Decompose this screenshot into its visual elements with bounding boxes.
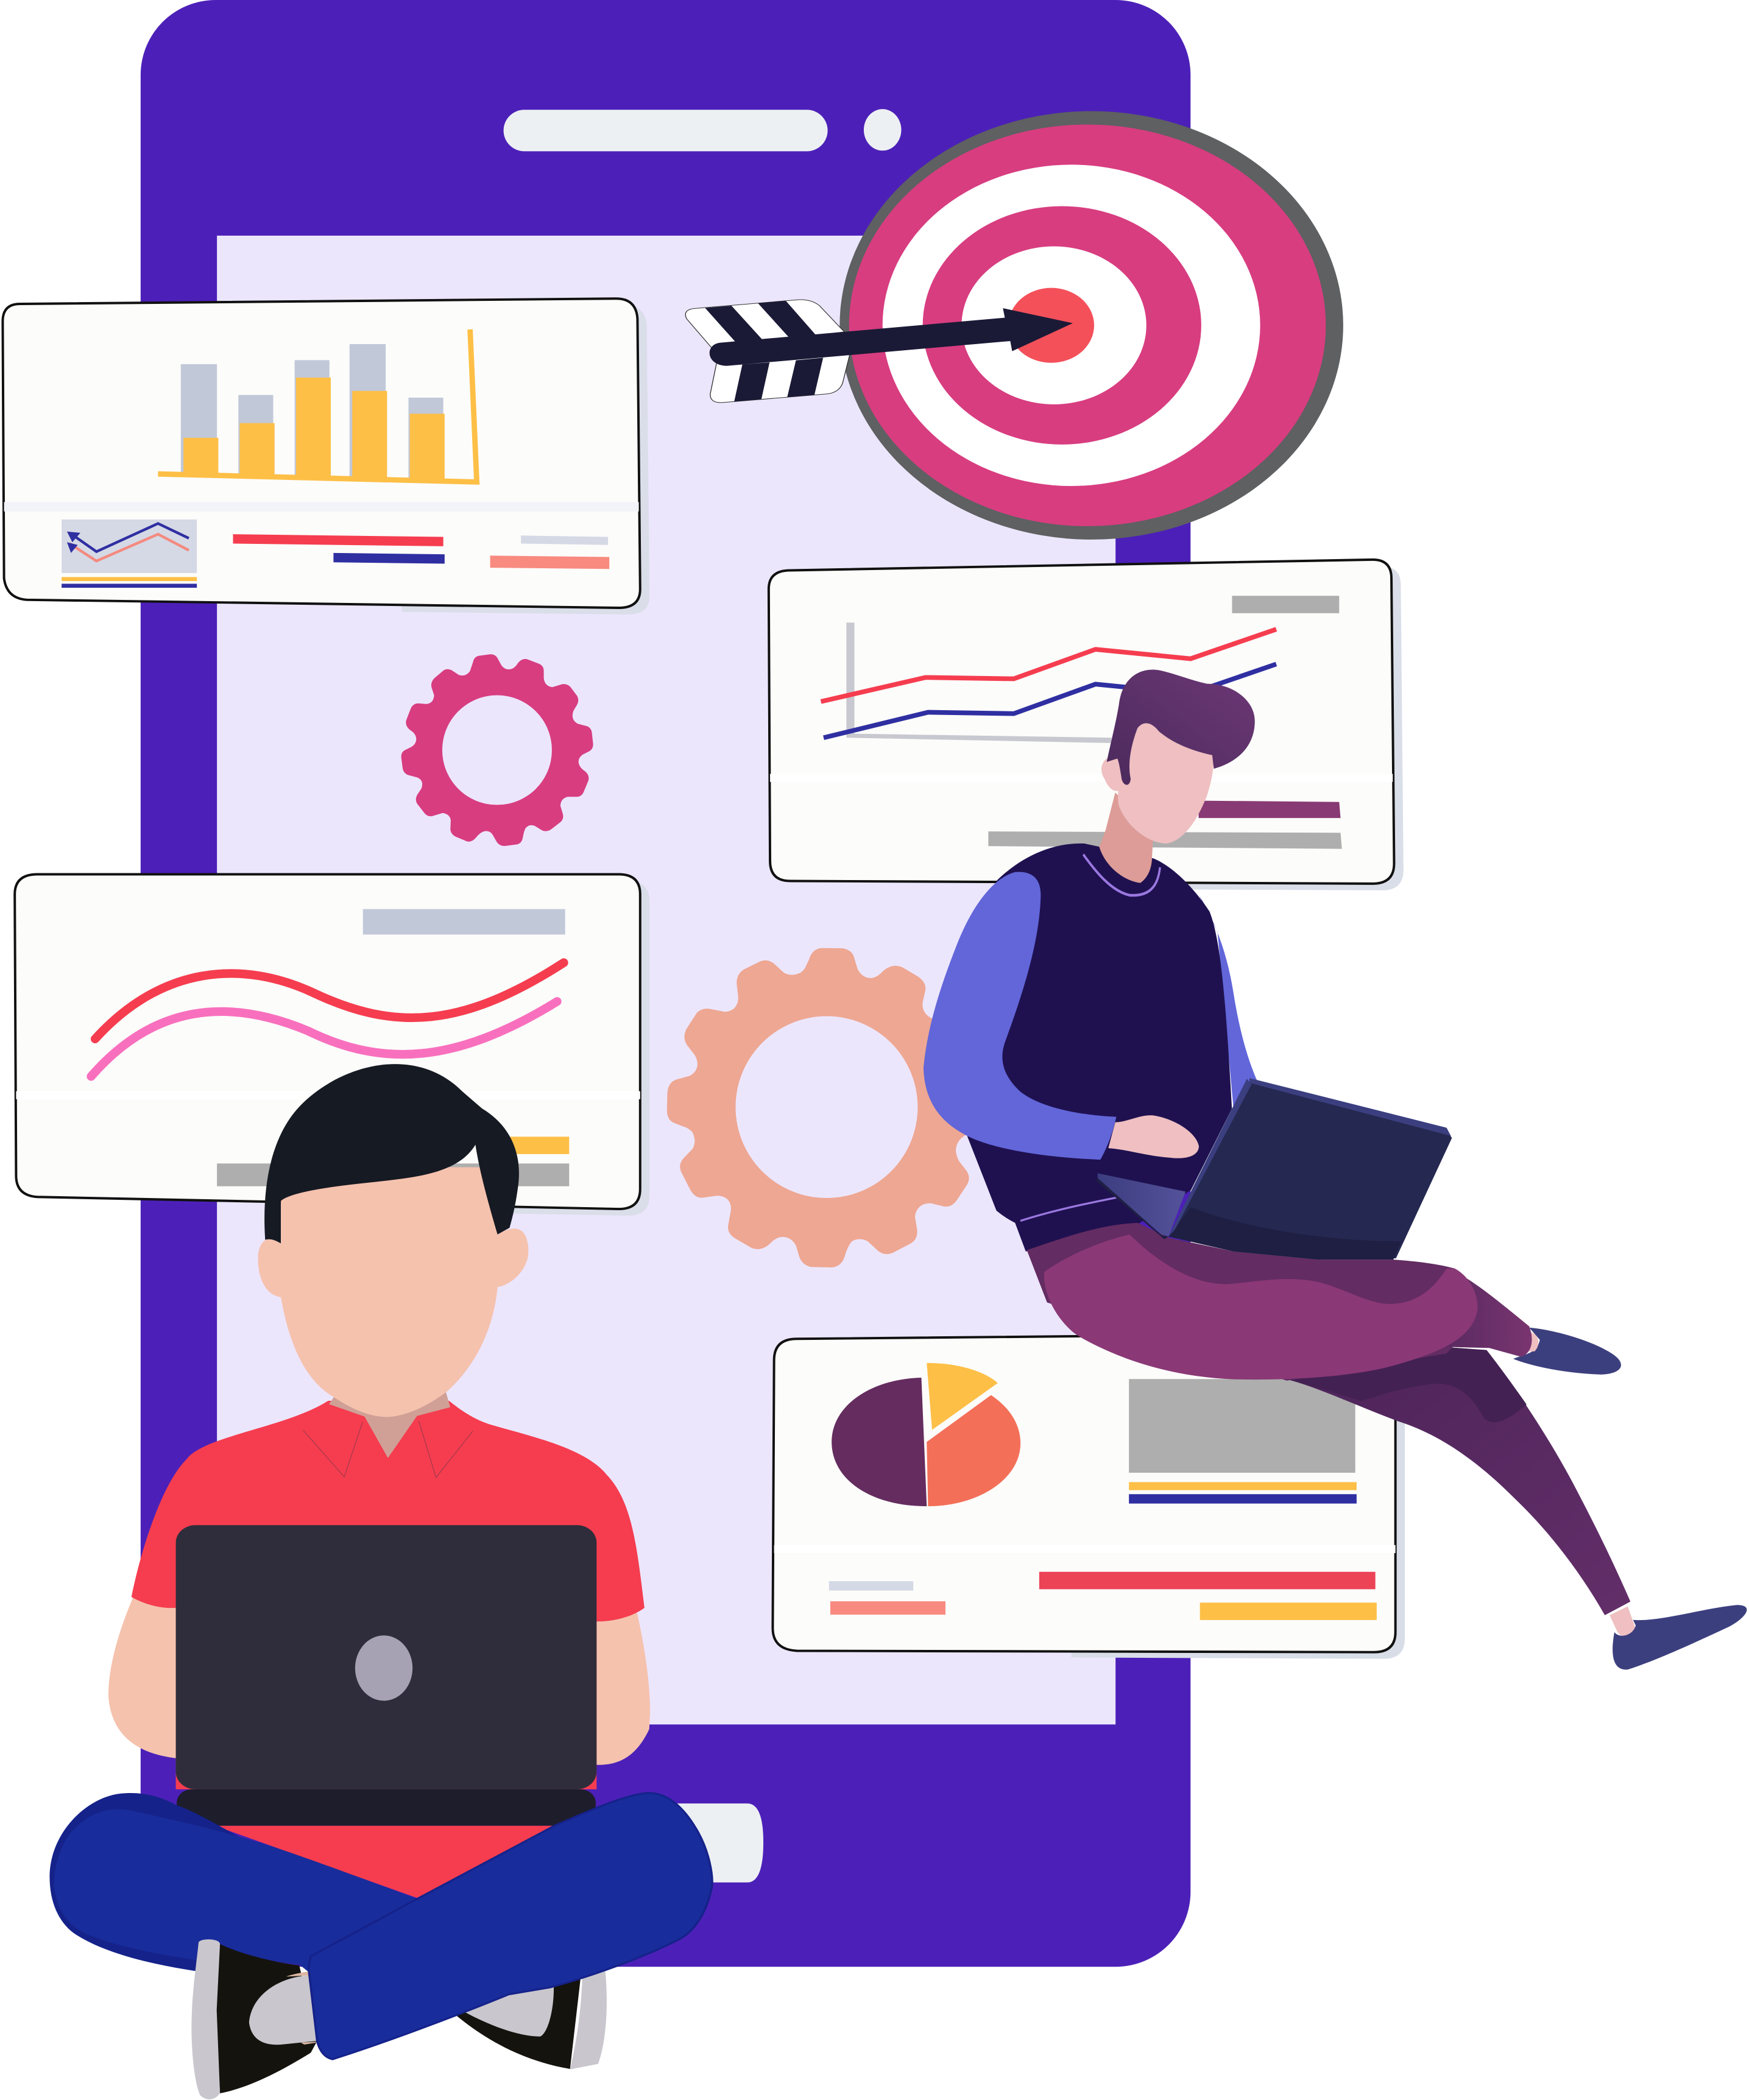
small line chart xyxy=(62,520,197,588)
torso and laptop xyxy=(49,1401,650,1972)
phone screen xyxy=(217,236,1115,1724)
grey label xyxy=(1232,596,1339,613)
thigh shadow xyxy=(1027,1223,1479,1381)
face xyxy=(1118,723,1214,844)
torso xyxy=(967,844,1232,1252)
laptop xyxy=(176,1525,596,1826)
shin xyxy=(1438,1269,1532,1357)
person: man with laptop sitting xyxy=(924,670,1747,1669)
arms xyxy=(108,1597,650,1765)
laptop xyxy=(1096,1078,1452,1260)
panel: wave chart card xyxy=(15,874,649,1216)
icon: pink gear xyxy=(401,654,593,846)
icon: salmon gear xyxy=(667,948,985,1267)
back sleeve xyxy=(1199,895,1257,1108)
legend bars xyxy=(233,534,609,569)
neck xyxy=(258,1168,528,1478)
back shoe xyxy=(1613,1605,1747,1669)
thigh xyxy=(1044,1235,1477,1379)
legend bars xyxy=(829,1482,1377,1620)
shoes xyxy=(191,1939,607,2099)
hair xyxy=(264,1064,519,1244)
bar chart xyxy=(158,329,477,482)
front shoe xyxy=(1513,1328,1621,1375)
phone home button xyxy=(656,1803,763,1883)
summary bars xyxy=(988,801,1342,849)
panel: bar chart card xyxy=(2,298,649,615)
right leg xyxy=(308,1793,712,2059)
summary bars xyxy=(217,1136,569,1186)
hand xyxy=(1108,1115,1199,1158)
neck xyxy=(1099,792,1154,883)
back leg xyxy=(1287,1347,1630,1615)
icon: arrow xyxy=(685,300,1073,403)
person: man with red shirt xyxy=(49,1064,712,2099)
icon: target xyxy=(839,111,1343,540)
panel: phone body xyxy=(141,0,1190,1967)
grey block xyxy=(1129,1379,1355,1473)
front foot skin xyxy=(1528,1331,1538,1351)
wave lines xyxy=(91,963,564,1076)
hem line xyxy=(1020,1197,1119,1221)
hair xyxy=(1107,670,1255,785)
ears xyxy=(258,1228,528,1297)
left leg xyxy=(49,1793,417,1972)
line chart xyxy=(821,622,1276,743)
sleeve xyxy=(924,872,1116,1160)
panel: line chart card xyxy=(769,560,1404,890)
grey label xyxy=(363,909,565,934)
face xyxy=(281,1168,498,1417)
ear xyxy=(1101,756,1125,791)
panel: pie chart card xyxy=(772,1333,1405,1659)
phone speaker xyxy=(504,110,828,151)
back foot skin xyxy=(1609,1606,1636,1637)
shirt xyxy=(132,1401,645,1789)
pie chart xyxy=(832,1363,1020,1506)
collar line xyxy=(1083,854,1160,895)
shirt hem xyxy=(215,1826,554,1898)
back leg shade xyxy=(1287,1347,1527,1422)
collar stitching xyxy=(303,1421,473,1478)
phone camera xyxy=(864,109,901,150)
